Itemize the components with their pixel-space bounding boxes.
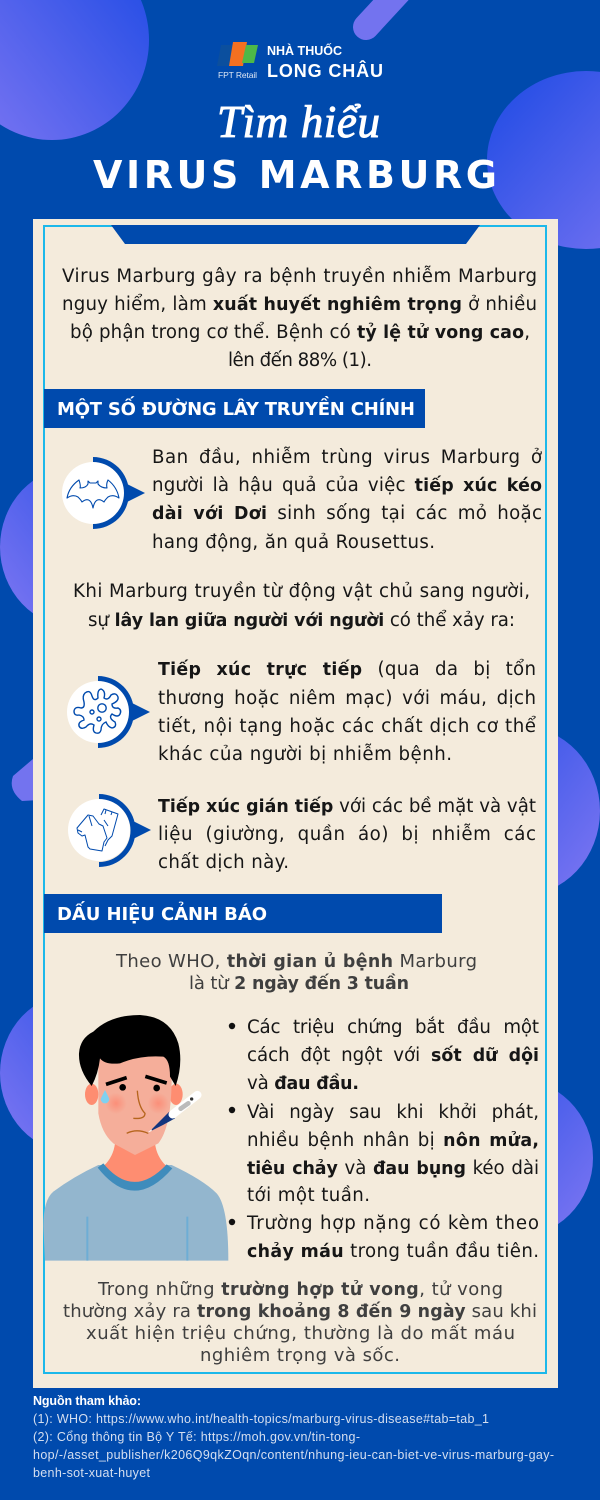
logo: NHÀ THUỐC [267,43,342,58]
bullet: first symptoms: và đau đầu. [247,1073,359,1094]
text: bat transmission: người là hậu quả của việc tiếp xúc kéo [152,475,542,496]
text: indirect contact: liệu (giường, quần áo) bị nhiễm các [158,824,536,845]
text: bat transmission: Ban đầu, nhiễm trùng virus Marburg ở [152,447,542,468]
text: direct contact: thương hoặc niêm mạc) với máu, dịch [158,688,536,709]
title: Tìm hiểu [217,97,380,147]
references [33,1394,554,1480]
text: fatal cases: thường xảy ra trong khoảng 8 đến 9 ngày sau khi [63,1301,537,1322]
text: incubation period [115,951,477,994]
bullet: severe cases: Trường hợp nặng có kèm theo [246,1213,539,1234]
heading: transmission routes [44,389,425,428]
bullet: later symptoms [229,1102,539,1206]
intro paragraph [62,266,537,371]
symptom list [229,1017,539,1262]
text: bat transmission: dài với Dơi sinh sống tại các mỏ hoặc [152,503,542,524]
text: incubation period: Theo WHO, thời gian ủ bệnh Marburg [115,951,477,972]
heading: warning signs: DẤU HIỆU CẢNH BÁO [57,901,267,925]
logo [217,42,383,81]
bullet: first symptoms: Các triệu chứng bắt đầu một [247,1017,539,1038]
intro paragraph: Virus Marburg gây ra bệnh truyền nhiễm Marburg [62,266,537,287]
text: direct contact: tiết, nội tạng hoặc các chất dịch cơ thể [158,716,536,737]
bullet: first symptoms: cách đột ngột với sốt dữ dội [247,1045,539,1066]
text: fatal cases: Trong những trường hợp tử vong, tử vong [97,1279,503,1300]
title: VIRUS MARBURG [93,153,497,197]
icon: bat [62,457,145,529]
heading: transmission routes: MỘT SỐ ĐƯỜNG LÂY TRUYỀN CHÍNH [57,396,415,420]
references: hop/-/asset_publisher/k206Q9qkZOqn/content/nhung-ieu-can-biet-ve-virus-marburg-gay- [33,1448,554,1462]
bullet: first symptoms [229,1017,539,1094]
bullet: later symptoms: tiêu chảy và đau bụng kéo dài [247,1158,539,1179]
text: indirect contact: chất dịch này. [158,852,289,873]
logo: LONG CHÂU [267,60,383,81]
text: direct contact: khác của người bị nhiễm bệnh. [158,744,452,765]
heading: warning signs [44,894,442,933]
references: benh-sot-xuat-huyet [33,1466,151,1480]
intro paragraph: lên đến 88% (1). [228,350,372,371]
text: fatal cases: nghiêm trọng và sốc. [200,1345,400,1366]
text: direct contact: Tiếp xúc trực tiếp (qua da bị tổn [158,659,536,680]
text: bat transmission [152,447,542,553]
text: fatal cases: xuất hiện triệu chứng, thường là do mất máu [86,1323,515,1344]
text: person to person [73,581,530,631]
references: (1): WHO: https://www.who.int/health-topics/marburg-virus-disease#tab=tab_1 [33,1412,489,1426]
panel: main card [33,219,558,1388]
logo: FPT Retail [218,70,257,80]
text: fatal cases [63,1279,537,1366]
text: bat transmission: hang động, ăn quả Rousettus. [152,532,435,553]
illustration: sick man [43,1015,228,1261]
text: person to person: sự lây lan giữa người với người có thể xảy ra: [88,610,515,631]
icon: virus [67,676,150,748]
title [93,97,497,197]
references: Nguồn tham khảo: [33,1394,141,1408]
text: person to person: Khi Marburg truyền từ động vật chủ sang người, [73,581,530,602]
bullet: later symptoms: Vài ngày sau khi khởi phát, [247,1102,539,1123]
text: indirect contact: Tiếp xúc gián tiếp với các bề mặt và vật [158,796,536,817]
text: indirect contact [158,796,536,873]
text: direct contact [158,659,536,765]
text: incubation period: là từ 2 ngày đến 3 tuần [189,973,409,994]
intro paragraph: bộ phận trong cơ thể. Bệnh có tỷ lệ tử vong cao, [70,322,530,343]
bullet: later symptoms: nhiều bệnh nhân bị nôn mửa, [247,1130,539,1151]
references: (2): Cổng thông tin Bộ Y Tế: https://moh.gov.vn/tin-tong- [33,1430,360,1444]
bullet: severe cases: chảy máu trong tuần đầu tiên. [247,1241,539,1262]
icon: clothes [68,794,151,867]
bullet: later symptoms: tới một tuần. [247,1185,370,1206]
intro paragraph: nguy hiểm, làm xuất huyết nghiêm trọng ở nhiều [62,294,537,315]
bullet: severe cases [229,1213,539,1262]
